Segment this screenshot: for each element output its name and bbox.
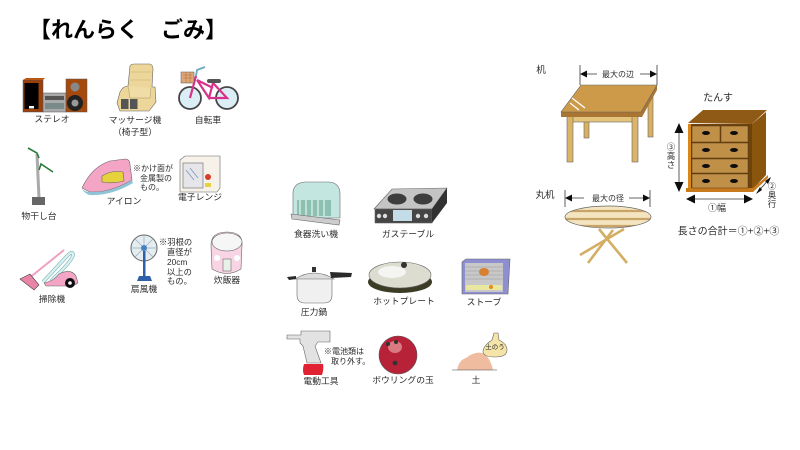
note: fan: ※羽根の [159,237,192,247]
item: rectangular desk [536,64,657,162]
item: soil and bag: 土のう [485,342,505,351]
dimension: height: 高 [667,151,675,161]
item: electric fan [131,235,193,294]
item: stereo: ステレオ [34,114,70,124]
item: vacuum cleaner: 掃除機 [39,293,65,304]
panel: small appliances, middle group [287,182,510,386]
note: iron: ※かけ面が [133,163,173,173]
item: gas stove: ガステーブル [382,228,434,239]
item: pressure cooker [287,267,352,317]
dimension: longest diameter: 最大の径 [592,193,624,203]
note: fan: 以上の [167,267,192,277]
note: fan: もの。 [167,276,192,286]
title: 【れんらく ごみ】 [29,18,227,42]
item: clothes drying stand [21,148,57,221]
item: microwave [178,156,222,202]
item: soil and bag: 土 [472,374,481,385]
dimension: longest side: 最大の辺 [602,69,634,79]
item: massage chair: マッサージ機 [109,114,162,125]
item: dish dryer [291,182,340,239]
item: rice cooker: 炊飯器 [214,274,240,285]
item: chest of drawers [667,92,777,213]
item: massage chair [109,64,162,137]
item: iron: アイロン [107,196,142,206]
item: massage chair: （椅子型） [113,126,157,137]
item: bowling ball: ボウリングの玉 [372,374,434,385]
item: electric drill: 電動工具 [303,376,339,386]
item: round table [535,189,656,263]
item: electric fan: 扇風機 [131,283,157,294]
item: rice cooker [211,232,242,285]
item: iron [82,159,173,206]
dimension: depth: 奥 [768,190,777,200]
note: fan [159,237,193,286]
item: hot plate [368,262,435,306]
dimension: width: ①幅 [708,202,726,213]
formula: total length: 長さの合計＝①+②+③ [678,224,779,238]
item: bicycle [179,67,238,125]
item: pressure cooker: 圧力鍋 [301,306,327,317]
item: hot plate: ホットプレート [373,296,435,306]
item: dish dryer: 食器洗い機 [294,228,338,239]
note: drill: ※電池類は [324,346,364,356]
item: heater stove [462,259,510,307]
note: fan: 直径が [167,247,193,257]
note: fan: 20cm [167,257,187,267]
panel: size-measured furniture [535,64,779,263]
item: gas stove [374,188,447,239]
item: heater stove: ストーブ [467,296,502,307]
dimension: height [667,123,684,192]
item: vacuum cleaner [20,250,78,304]
dimension: depth [756,177,777,209]
item: round table: 丸机 [535,189,555,201]
dimension: depth: ② [768,182,776,191]
item: microwave: 電子レンジ [178,192,222,202]
panel: small appliances, left group [20,64,242,304]
note: iron: 金属製の [140,173,172,183]
dimension: depth: 行 [768,199,777,209]
item: clothes drying stand: 物干し台 [21,210,57,221]
note: drill [324,346,370,366]
item: bicycle: 自転車 [195,114,221,125]
note: iron: もの。 [140,183,164,192]
dimension: height: ③ [667,142,676,152]
item: rectangular desk: 机 [536,64,546,76]
item: chest of drawers: たんす [703,92,733,104]
dimension: height: さ [667,160,675,170]
item: electric drill [287,331,370,386]
note: drill: 取り外す。 [331,356,370,366]
item: stereo [23,78,87,124]
item: soil and bag [452,333,507,385]
note: iron [133,163,173,192]
item: bowling ball [372,336,434,385]
